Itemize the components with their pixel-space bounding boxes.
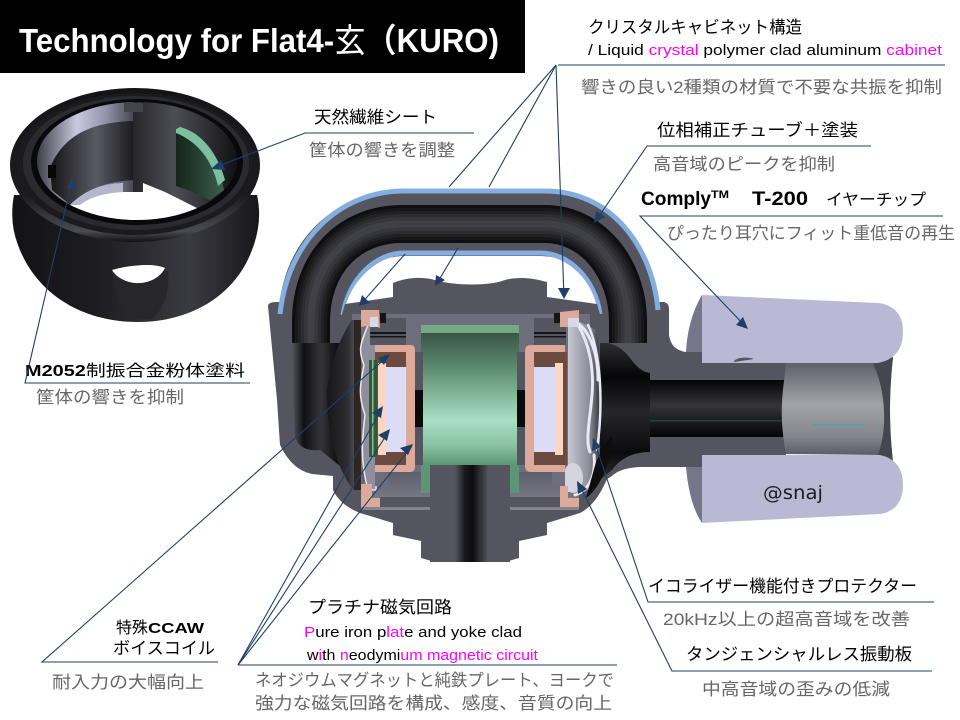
rim pieces [361,310,380,328]
label: Comply ear tip: TM [711,189,729,201]
label: platinum magnetic circuit: Pure iron p late and yoke clad [304,625,522,641]
label: tangential-less diaphragm [577,481,932,699]
bore flare [873,357,893,462]
label: platinum magnetic circuit: with neodymi um magnetic circuit [306,648,538,664]
ring interior [37,102,237,220]
iron plate [378,363,386,455]
right magnetic circuit [517,310,579,507]
label: phase correction tube [594,120,871,223]
earphone housing outer shell [268,191,702,562]
upper block with slots [534,313,566,345]
label: protector: イコライザー機能付きプロテクター [648,577,917,596]
top cap block [341,278,601,318]
blue coating inner [343,253,600,315]
label: protector: 20kHz以上の超高音域を改善 [663,610,910,629]
label: protector [592,438,934,629]
label: crystal cabinet [359,18,945,306]
left diaphragm wave [360,325,376,490]
left magnetic circuit [361,310,423,507]
label: Comply ear tip: ぴったり耳穴にフィット重低音の再生 [667,224,955,243]
nozzle [650,363,786,455]
inner chamber [327,314,601,510]
label: CCAW voice coil: 特殊 [116,619,148,637]
yoke [375,345,415,472]
label: tangential-less diaphragm: タンジェンシャルレス振動板 [686,645,912,664]
lower ring body [12,195,259,322]
title: Technology for Flat4-玄（KURO) [19,22,499,59]
white space under arch [345,256,597,308]
label: platinum magnetic circuit: 強力な磁気回路を構成、感度、音質の向上 [255,694,612,713]
label: natural fiber sheet [211,108,474,170]
label: crystal cabinet: 響きの良い2種類の材質で不要な共振を抑制 [581,78,942,97]
label: tangential-less diaphragm: 中高音域の歪みの低減 [702,680,890,699]
green damping core [421,325,519,493]
voice coil [369,360,377,457]
dome suspension [563,463,583,493]
protector dark crescent [586,437,612,498]
lower tip [686,467,702,523]
dark left frame strip [354,320,361,490]
protector and tangential-less diaphragm strips [570,320,600,495]
phase correction tube: dark bore [311,224,628,343]
title [0,0,525,73]
copper interior [375,352,406,465]
right shoulder tube block [600,343,650,480]
upper block with slots [370,313,406,345]
label: platinum magnetic circuit [238,406,617,713]
upper ring [10,88,260,242]
right diaphragm dome [568,316,601,492]
label: platinum magnetic circuit: プラチナ磁気回路 [308,598,452,617]
label: Comply ear tip [640,189,955,329]
label: CCAW voice coil: CCAW [148,620,205,637]
side port [112,264,168,319]
label: M2052 coating [25,178,250,407]
label: crystal cabinet: クリスタルキャビネット構造 [588,18,802,37]
natural fiber sheet [176,127,225,200]
watermark: @snaj [763,482,823,504]
neodymium magnet [385,367,406,452]
label: phase correction tube: 高音域のピークを抑制 [653,155,835,174]
label: Comply ear tip: Comply [641,189,711,210]
label: crystal cabinet: / Liquid crystal polymer clad aluminum cabinet [588,43,942,59]
blue coating outer [280,191,658,314]
label: M2052 coating: M2052 制振合金粉体塗料 [25,362,245,380]
left diaphragm dome [327,320,362,490]
nozzle and ear tip [650,295,903,523]
label: platinum magnetic circuit: ネオジウムマグネットと純鉄プレート、ヨークで [255,671,614,690]
label: M2052 coating: 筐体の響きを抑制 [36,388,184,407]
left leg tube [292,343,345,470]
label: CCAW voice coil: 耐入力の大幅向上 [52,673,204,692]
label: CCAW voice coil [42,354,390,692]
ring housing illustration [10,88,260,322]
label: Comply ear tip: イヤーチップ [826,191,926,209]
upper tip [686,295,702,352]
label: natural fiber sheet: 筐体の響きを調整 [309,141,455,160]
lower shelves [380,497,560,507]
bore [782,357,893,462]
label: phase correction tube: 位相補正チューブ＋塗装 [657,120,858,140]
leader lines: crystal cabinet [360,65,945,305]
label: Comply ear tip: T-200 [752,189,808,210]
label: CCAW voice coil: ボイスコイル [113,639,215,658]
label: natural fiber sheet: 天然繊維シート [314,108,437,127]
central vertical tube [430,465,510,562]
column [415,352,423,465]
